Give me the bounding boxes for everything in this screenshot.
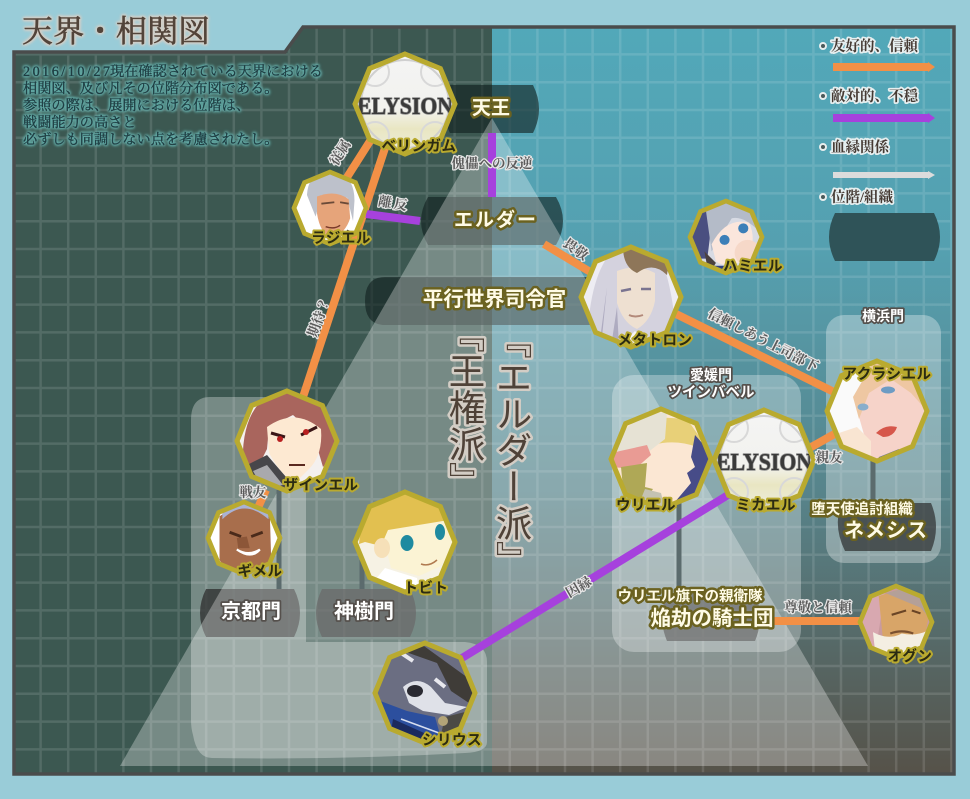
rank labels: 横浜門: [862, 308, 904, 324]
rank labels: エルダー: [454, 208, 538, 231]
character names: ウリエル: [616, 497, 676, 514]
character names: ラジエル: [311, 231, 371, 247]
character names: トビト: [404, 579, 448, 597]
character names: ミカエル: [736, 497, 796, 514]
arrow: friendly: [833, 62, 935, 72]
relation labels: 従属: [326, 137, 354, 168]
rank labels: 愛媛門: [690, 367, 732, 383]
relation labels: 尊敬と信頼: [784, 599, 853, 615]
character names: メタトロン: [618, 332, 692, 349]
character names: ベリンガム: [382, 138, 456, 155]
character names: [238, 138, 932, 749]
relation labels: 離反: [377, 193, 411, 214]
relation labels: 戦友: [240, 484, 267, 500]
portrait: tobit: [355, 490, 455, 592]
portrait: gimel: [208, 501, 280, 574]
rank bar: shinju gate: [316, 589, 416, 637]
character names: シリウス: [422, 732, 482, 749]
portrait: beringam logo: [355, 54, 455, 154]
portrait: sirius: [375, 641, 475, 745]
description text: [23, 64, 323, 148]
description text: 戦闘能力の高さと: [23, 114, 137, 131]
legend: [820, 37, 940, 261]
rank bar: homura knights: [662, 593, 760, 641]
portrait: beringam logo: ELYSION: [357, 94, 454, 120]
rank bar: elder: [421, 197, 563, 245]
description text: 2016/10/27: [23, 64, 110, 80]
rank labels: ウリエル旗下の親衛隊: [618, 587, 763, 605]
faction labels: [444, 316, 532, 578]
relation labels: 信頼しあう上司部下: [706, 305, 821, 374]
relation labels: 傀儡への反逆: [452, 155, 533, 171]
portrait: uriel: [611, 409, 711, 509]
panel: yokohama gate: [826, 315, 941, 563]
rank labels: 堕天使追討組織: [811, 500, 913, 518]
rank labels: 天王: [472, 98, 510, 119]
portrait: razieru: [294, 171, 366, 251]
faction: elder: 『エルダー派』: [490, 322, 532, 578]
portrait: agurashieru: [827, 359, 927, 463]
arrow: kinship: [833, 171, 935, 179]
faction: royal: 『王権派』: [444, 316, 484, 498]
character names: ギメル: [238, 563, 282, 580]
rank connectors: [279, 455, 873, 595]
relation labels: [240, 137, 853, 615]
rank labels: 焔劫の騎士団: [650, 607, 774, 630]
rank labels: 京都門: [221, 600, 281, 623]
description text: 必ずしも同調しない点を考慮されたし。: [23, 131, 278, 148]
panel: kyoto and shinju gates: [191, 397, 487, 758]
portrait: ogun: [860, 585, 932, 658]
rank labels: 平行世界司令官: [423, 288, 566, 311]
rank bar: tennou: [444, 85, 539, 133]
character names: ザインエル: [284, 477, 358, 494]
relation labels: 親友: [816, 449, 843, 465]
relation labels: 因縁: [563, 574, 595, 600]
legend: 敵対的、不穏: [831, 87, 919, 105]
panel: ehime gate: [612, 375, 801, 652]
rank labels: [221, 98, 928, 630]
portrait: zainel: [237, 389, 337, 493]
title: 天界・相関図: [22, 14, 210, 49]
description text: 相関図、及び凡その位階分布図である。: [23, 80, 278, 97]
relation lines: [256, 133, 862, 658]
portrait: hamiel: [690, 200, 762, 280]
portrait: mikael logo: [714, 410, 814, 510]
character names: アクラシエル: [842, 366, 932, 383]
legend: 友好的、信頼: [831, 37, 919, 55]
rank bar: nemesis: [838, 503, 936, 551]
relation labels: 期待？: [304, 296, 333, 339]
description text: 参照の際は、展開における位階は、: [23, 97, 250, 114]
character names: オグン: [888, 647, 932, 665]
rank bar: kyoto gate: [200, 589, 300, 637]
purple lines: [366, 133, 728, 658]
portrait: metatron: [581, 246, 681, 347]
portrait: mikael logo: ELYSION: [716, 450, 813, 476]
legend: 位階/組織: [831, 188, 894, 206]
orange lines: [256, 138, 862, 621]
legend: 血縁関係: [831, 139, 890, 156]
description text: 現在確認されている天界における: [110, 64, 323, 80]
legend swatch: rank bar: [829, 213, 940, 261]
arrow: hostile: [833, 113, 935, 123]
rank labels: ネメシス: [844, 519, 928, 542]
rank labels: 神樹門: [334, 600, 394, 623]
rank labels: ツインバベル: [668, 385, 755, 401]
rank bar: parallel world commander: [365, 277, 590, 325]
triangle hierarchy: [120, 118, 868, 766]
character names: ハミエル: [723, 259, 783, 275]
relation labels: 畏敬: [560, 235, 592, 263]
